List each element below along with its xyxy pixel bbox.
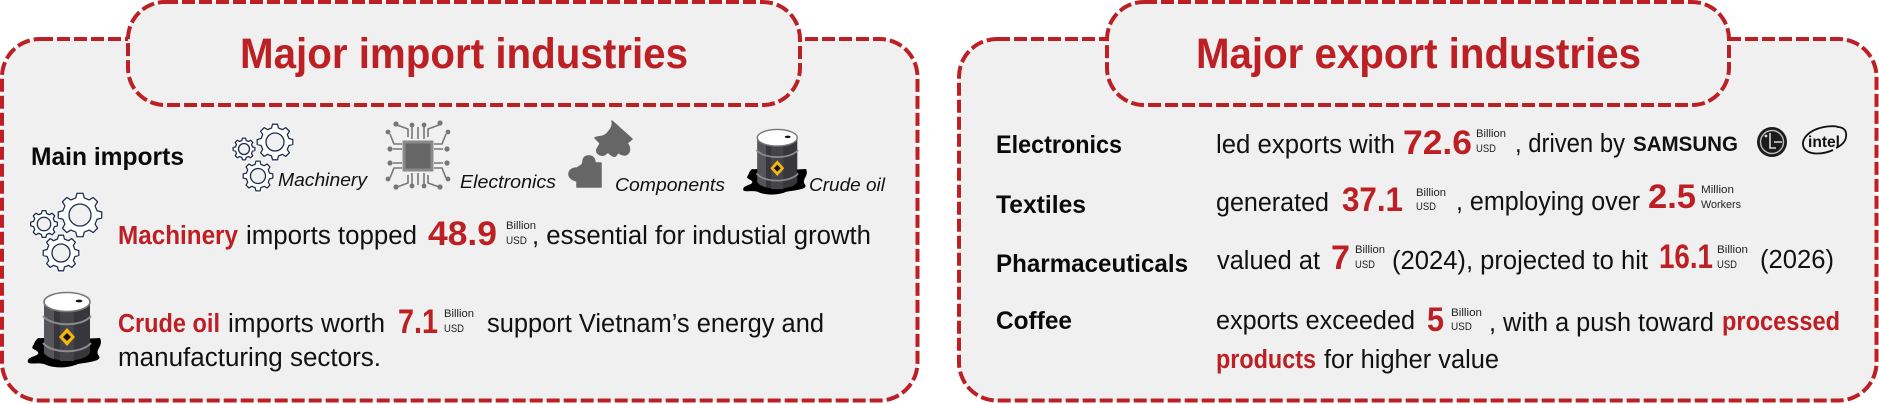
row: coffee: Billion	[1451, 307, 1482, 319]
row: pharmaceuticals	[996, 238, 1834, 278]
row: textiles: Billion	[1416, 187, 1446, 199]
row: textiles: USD	[1416, 201, 1436, 213]
row: textiles: 37.1	[1342, 181, 1403, 219]
title: export: Major export industries	[1196, 30, 1641, 78]
text: crude oil imports: support Vietnam’s energy and	[487, 310, 824, 338]
text: machinery imports	[118, 215, 871, 253]
text: machinery imports: Machinery	[118, 222, 239, 250]
row: textiles: generated	[1216, 189, 1329, 217]
icon: components puzzle pieces	[569, 121, 632, 187]
text: crude oil imports: Billion	[444, 308, 474, 320]
row: pharmaceuticals: (2024), projected to hit	[1392, 247, 1648, 275]
text: machinery imports: USD	[506, 235, 527, 247]
panel: major export industries	[959, 2, 1876, 400]
row: coffee: processed	[1722, 308, 1840, 336]
text: crude oil imports: Crude oil	[118, 310, 220, 338]
row: textiles: Textiles	[996, 191, 1086, 219]
row: electronics: led exports with	[1216, 131, 1395, 159]
text: crude oil imports: 7.1	[398, 303, 438, 341]
row: pharmaceuticals: (2026)	[1760, 246, 1834, 274]
row: coffee	[996, 301, 1840, 374]
caption: components: Components	[615, 174, 725, 195]
icon: machinery gears small	[233, 124, 293, 191]
row: pharmaceuticals: USD	[1717, 259, 1737, 271]
icon: electronics chip	[386, 120, 450, 190]
row: electronics: Electronics	[996, 131, 1122, 159]
row: textiles	[996, 178, 1741, 219]
row: coffee: USD	[1451, 321, 1472, 333]
row: pharmaceuticals: valued at	[1217, 247, 1320, 275]
caption: machinery: Machinery	[278, 169, 369, 190]
row: textiles: , employing over	[1456, 188, 1640, 216]
row: electronics: USD	[1476, 143, 1496, 155]
row: electronics	[996, 124, 1846, 162]
label: main imports: Main imports	[31, 143, 184, 171]
panel: major import industries	[2, 2, 918, 400]
row: textiles: Million	[1701, 184, 1734, 196]
row: electronics: , driven by	[1515, 130, 1625, 158]
logo: intel	[1803, 126, 1846, 154]
row: pharmaceuticals: Pharmaceuticals	[996, 250, 1188, 278]
text: machinery imports: , essential for industial growth	[532, 222, 871, 250]
text: machinery imports: 48.9	[428, 215, 497, 253]
text: crude oil imports	[118, 303, 824, 372]
heading box: import	[128, 2, 800, 105]
row: pharmaceuticals: Billion	[1355, 244, 1385, 256]
caption: electronics: Electronics	[460, 171, 556, 192]
caption: crude oil: Crude oil	[809, 174, 886, 195]
text: crude oil imports: imports worth	[228, 310, 385, 338]
row: coffee: products	[1216, 346, 1316, 374]
row: pharmaceuticals: 7	[1331, 239, 1350, 277]
title: import: Major import industries	[240, 30, 688, 78]
row: textiles: 2.5	[1648, 178, 1696, 216]
text: machinery imports: imports topped	[246, 222, 417, 250]
icon: machinery gears large	[31, 193, 102, 271]
text: crude oil imports: manufacturing sectors.	[118, 344, 381, 372]
row: coffee: , with a push toward	[1489, 309, 1714, 337]
logo: samsung: SAMSUNG	[1633, 133, 1738, 156]
text: crude oil imports: USD	[444, 323, 464, 335]
text: machinery imports: Billion	[506, 220, 536, 232]
icon: crude oil barrel small	[743, 129, 807, 195]
icon: crude oil barrel large	[28, 292, 101, 367]
row: textiles: Workers	[1701, 199, 1741, 211]
row: electronics: 72.6	[1403, 124, 1472, 162]
heading box: export	[1107, 2, 1729, 105]
row: pharmaceuticals: 16.1	[1659, 238, 1713, 276]
row: electronics: Billion	[1476, 128, 1506, 140]
row: coffee: exports exceeded	[1216, 307, 1415, 335]
row: pharmaceuticals: USD	[1355, 259, 1375, 271]
logo: lg	[1757, 127, 1787, 157]
row: coffee: Coffee	[996, 307, 1072, 335]
row: coffee: for higher value	[1324, 346, 1499, 374]
row: coffee: 5	[1427, 301, 1444, 339]
logo: intel: intel	[1808, 134, 1840, 151]
row: pharmaceuticals: Billion	[1717, 244, 1748, 256]
